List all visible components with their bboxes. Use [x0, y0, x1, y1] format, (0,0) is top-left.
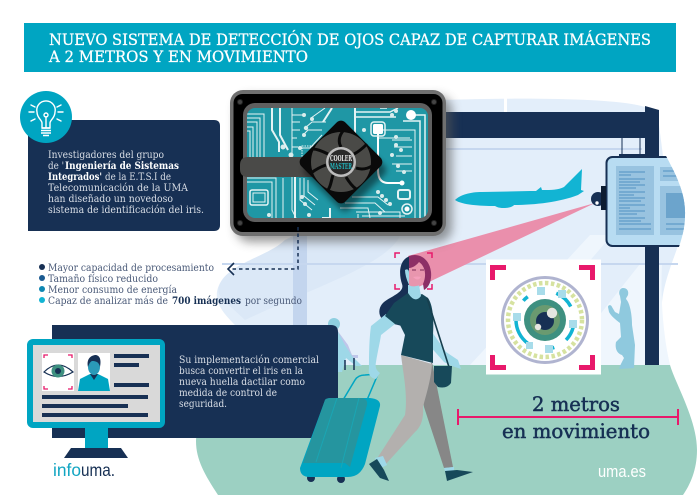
arrow: dashed link from device to features	[228, 227, 298, 275]
ceiling beam and column	[440, 106, 659, 365]
logo: uma.es: uma.es	[598, 462, 646, 481]
grey cable bar	[240, 157, 312, 177]
shoes	[369, 459, 473, 481]
text lines	[42, 354, 149, 417]
cooling fan: MASTER	[330, 161, 352, 171]
feature list	[39, 262, 302, 307]
sign board	[606, 154, 686, 247]
cooling fan: COOLER	[330, 153, 352, 163]
front leg	[378, 355, 432, 465]
panel: research group: sistema de identificación del iris.	[48, 204, 204, 216]
ear and left face	[405, 269, 409, 285]
title banner	[24, 23, 676, 72]
hair front under light	[409, 255, 431, 290]
panel: commercial use: medida de control de	[179, 387, 277, 399]
panel: commercial use: nueva huella dactilar como	[179, 376, 305, 388]
panel: commercial use: Su implementación comercial	[179, 354, 320, 366]
panel: research group: Integrados'	[48, 171, 102, 183]
suitcase	[300, 374, 380, 483]
distance label: 2 metros	[532, 392, 620, 416]
information sign with camera	[591, 138, 696, 246]
panel: research group: han diseñado un novedoso	[48, 193, 173, 205]
eye scan picture	[42, 353, 74, 391]
cooling fan	[297, 118, 385, 206]
panel: commercial use	[52, 325, 338, 438]
title banner: A 2 METROS Y EN MOVIMIENTO	[48, 48, 308, 66]
right arm	[428, 332, 461, 369]
fan shadow	[301, 126, 389, 214]
iris graphic	[502, 278, 588, 362]
focus brackets	[492, 268, 592, 368]
distance marker	[458, 409, 678, 425]
logo: infouma: uma.	[81, 460, 115, 480]
floor	[196, 365, 697, 495]
camera	[591, 186, 606, 210]
feature list: Menor consumo de energía	[48, 284, 178, 296]
circuit traces	[247, 108, 425, 218]
iris scan card	[486, 260, 601, 374]
logo: infouma	[53, 460, 115, 480]
panel: research group: Investigadores del grupo	[48, 149, 164, 161]
seated traveller silhouette	[328, 318, 362, 372]
icon: computer monitor	[27, 339, 165, 458]
panel: research group	[28, 120, 220, 231]
distance label	[458, 392, 678, 443]
feature list: Mayor capacidad de procesamiento	[48, 262, 214, 274]
sign hangers	[622, 138, 640, 155]
hair back	[379, 256, 415, 326]
distant traveller silhouette	[608, 288, 635, 369]
shirt	[385, 293, 433, 363]
feet	[375, 456, 454, 471]
chips	[250, 122, 412, 214]
logo: infouma: info	[53, 460, 81, 480]
title banner: NUEVO SISTEMA DE DETECCIÓN DE OJOS CAPAZ DE CAPTURAR IMÁGENES	[49, 31, 651, 49]
left arm	[369, 314, 395, 379]
panel: research group: Ingeniería de Sistemas	[65, 160, 179, 172]
bag strap	[427, 298, 449, 367]
processor board device	[230, 90, 452, 242]
woman walking	[369, 253, 473, 481]
portrait picture	[78, 353, 110, 391]
back leg	[420, 362, 453, 468]
shoulder bag	[434, 366, 452, 388]
airplane	[455, 169, 584, 208]
neck	[408, 285, 421, 299]
background scene: airport hall	[217, 98, 685, 365]
panel: commercial use: seguridad.	[179, 398, 227, 410]
screws	[238, 100, 436, 226]
distance label: en movimiento	[502, 419, 650, 443]
focus brackets	[395, 253, 432, 289]
panel: research group: Telecomunicación de la UMA	[48, 182, 188, 194]
panel: commercial use: busca convertir el iris en la	[179, 365, 304, 377]
circuit pads	[267, 109, 416, 217]
feature list: Tamaño físico reducido	[48, 273, 158, 285]
panel: research group: de la E.T.S.I de	[105, 171, 171, 183]
face	[409, 262, 427, 286]
feature list: 700 imágenes	[172, 295, 241, 307]
light beam from camera	[408, 203, 595, 292]
face details	[412, 269, 424, 271]
feature list: por segundo	[245, 295, 302, 307]
feature list: Capaz de analizar más de	[48, 295, 168, 307]
icon: light bulb	[20, 91, 72, 143]
panel: research group: de '	[48, 160, 64, 172]
